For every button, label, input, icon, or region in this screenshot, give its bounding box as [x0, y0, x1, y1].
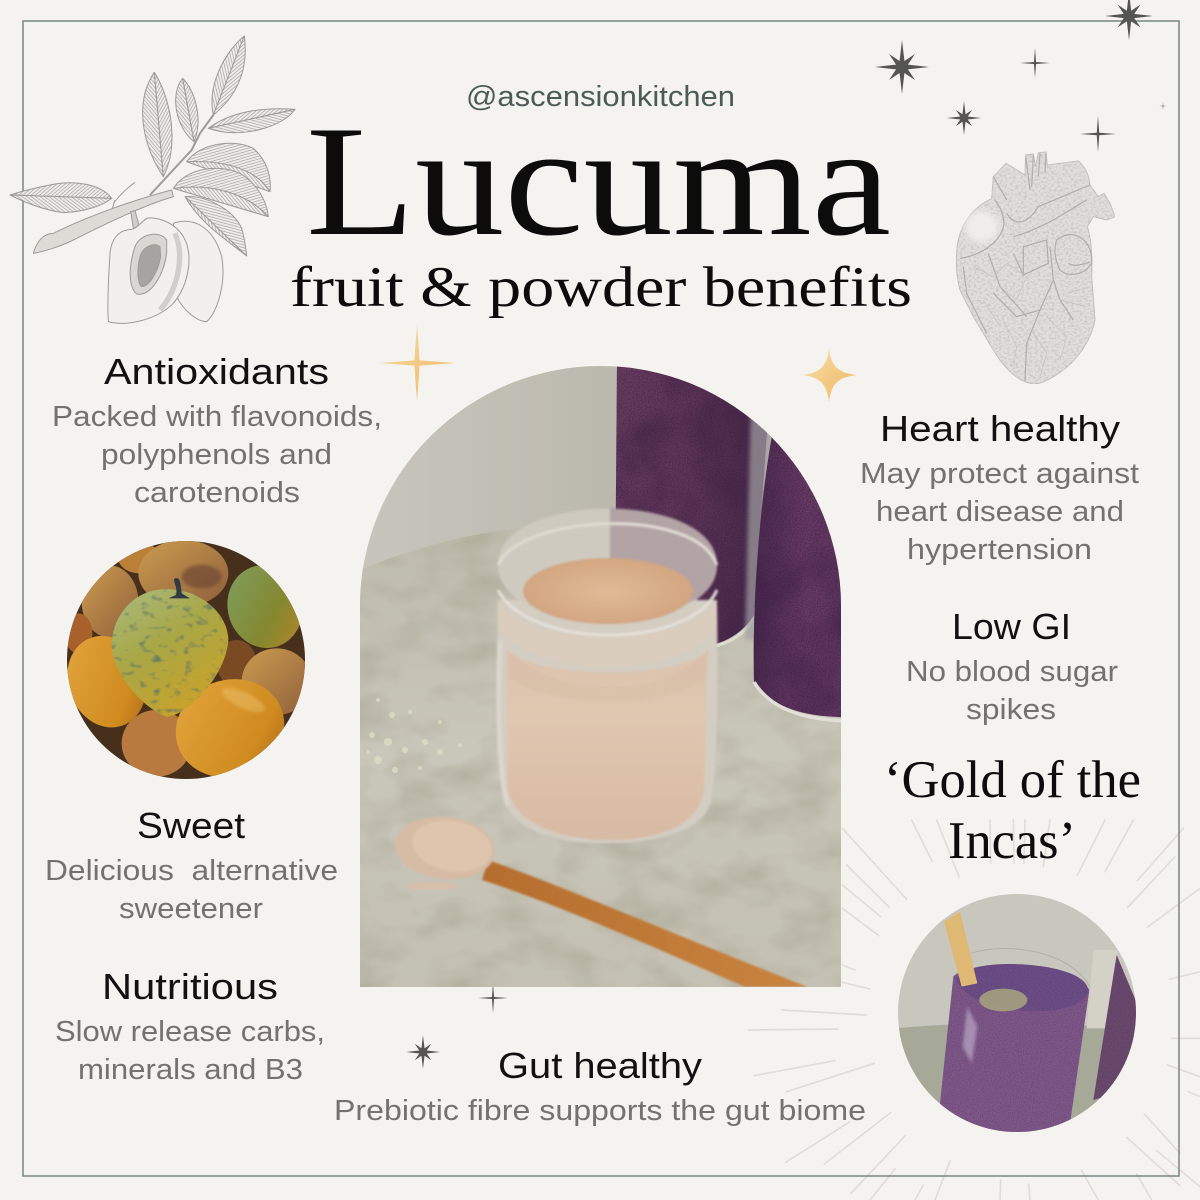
callout: gold of the incas: ‘Gold of the: [884, 751, 1141, 809]
marble table: [360, 500, 845, 990]
benefit: low GI: [906, 606, 1118, 726]
decorative rays around smoothie: [748, 820, 1200, 1200]
illustration: anatomical heart: [956, 152, 1115, 384]
callout: gold of the incas: Incas’: [948, 812, 1076, 870]
benefit: nutritious: [55, 966, 325, 1086]
benefit: low GI: spikes: [966, 694, 1056, 726]
smoothie bottle back: [615, 362, 772, 646]
benefit: gut healthy: Gut healthy: [498, 1045, 702, 1086]
benefit: sweet: sweetener: [119, 893, 263, 925]
illustration: lucuma branch with fruit: [10, 36, 295, 323]
title: Lucuma: [306, 94, 891, 269]
benefit: antioxidants: Antioxidants: [104, 351, 329, 392]
photo: lucuma fruit circle: [67, 541, 305, 779]
callout: gold of the incas: [884, 751, 1141, 870]
benefit: nutritious: minerals and B3: [78, 1054, 303, 1086]
benefit: nutritious: Slow release carbs,: [55, 1016, 325, 1048]
benefit: sweet: Delicious alternative: [45, 855, 338, 887]
glass jar: [497, 508, 717, 843]
benefit: heart healthy: May protect against: [860, 458, 1139, 490]
benefit: antioxidants: carotenoids: [134, 477, 300, 509]
smoothie bottle front: [752, 437, 841, 722]
gold sparkle stars: [379, 325, 857, 402]
benefit: sweet: Sweet: [137, 805, 245, 846]
benefit: heart healthy: hypertension: [907, 534, 1092, 566]
handle: @ascensionkitchen: [466, 81, 735, 113]
photo: lucuma powder jar in arch: [360, 360, 860, 990]
benefit: sweet: [45, 805, 338, 925]
subtitle: fruit & powder benefits: [290, 256, 912, 319]
benefit: gut healthy: Prebiotic fibre supports the gut biome: [334, 1095, 866, 1127]
benefit: antioxidants: polyphenols and: [101, 439, 332, 471]
benefit: heart healthy: heart disease and: [876, 496, 1124, 528]
benefit: gut healthy: [334, 1045, 866, 1127]
benefit: antioxidants: [52, 351, 382, 509]
benefit: nutritious: Nutritious: [102, 966, 278, 1007]
photo: purple smoothie circle: [897, 893, 1138, 1135]
wooden spoon with powder: [392, 812, 808, 987]
benefit: heart healthy: [860, 408, 1139, 566]
dark sparkle stars: [406, 0, 1167, 1069]
benefit: low GI: No blood sugar: [906, 656, 1118, 688]
benefit: heart healthy: Heart healthy: [880, 408, 1120, 449]
benefit: antioxidants: Packed with flavonoids,: [52, 401, 382, 433]
benefit: low GI: Low GI: [952, 606, 1071, 647]
